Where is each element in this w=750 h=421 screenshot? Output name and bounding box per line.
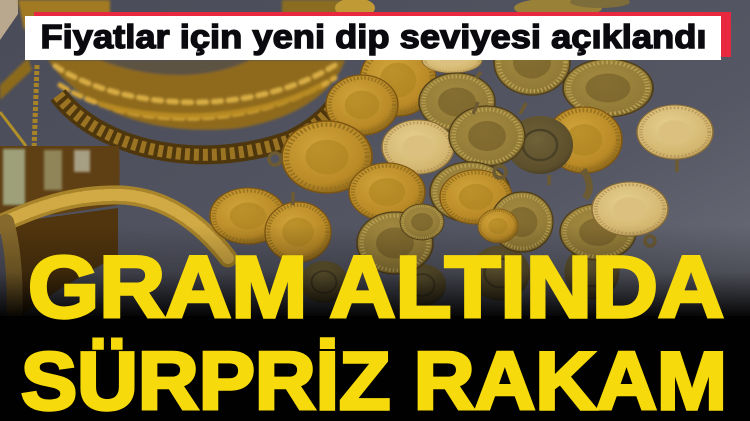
gold rope knot [0, 195, 228, 330]
gift pouch with hanging cord [0, 65, 120, 220]
back coins [300, 0, 630, 306]
stack of gold coins [210, 0, 713, 306]
black footer band [0, 316, 750, 421]
pale top-left corner [0, 0, 18, 40]
dark fade into footer [0, 225, 750, 318]
red accent bar [34, 12, 731, 57]
gold chain: blurred upper strands [0, 0, 360, 130]
white panel [25, 16, 721, 60]
coin cluster [210, 29, 713, 274]
headline banner [25, 12, 731, 60]
lower left pouch shadow [14, 208, 118, 318]
gold chain: braided lower strand [58, 95, 335, 155]
main title line 1: GRAM ALTINDA [28, 239, 724, 336]
subheading text: Fiyatlar için yeni dip seviyesi açıklandı [40, 18, 706, 55]
coin loops [269, 72, 677, 246]
